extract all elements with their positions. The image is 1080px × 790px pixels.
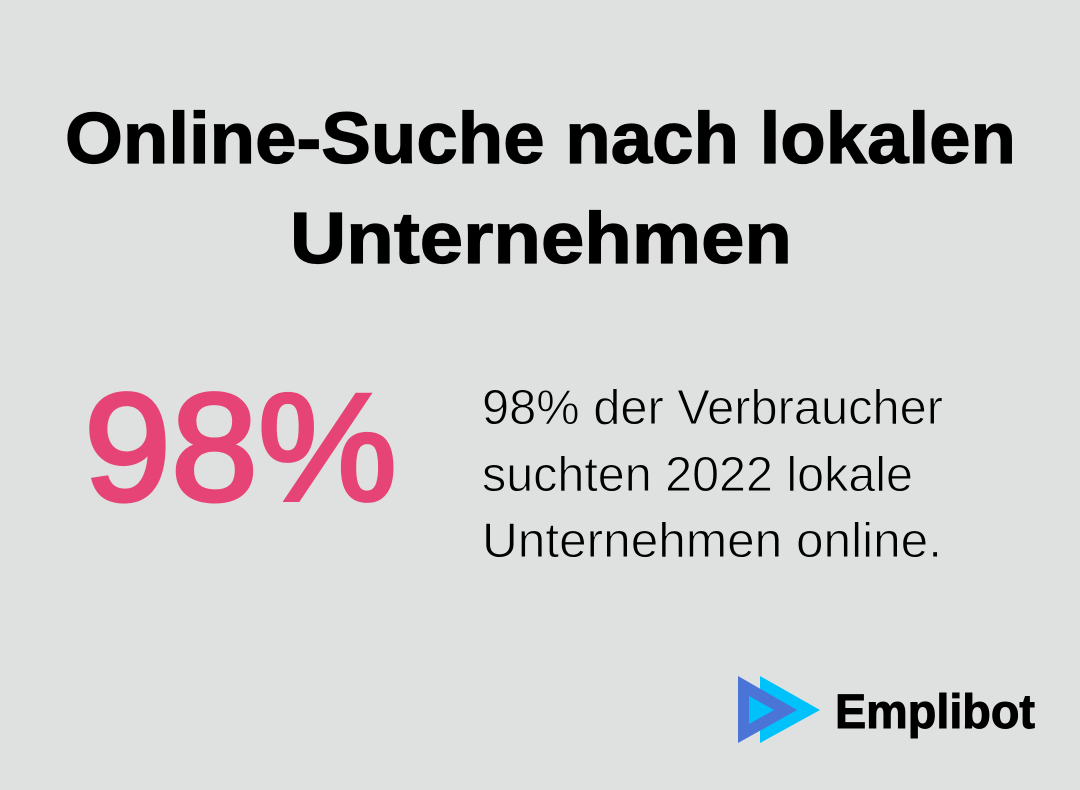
title: Unternehmen [290,199,792,279]
logo wordmark: Emplibot [835,686,1035,739]
description text: 98% der Verbraucher [482,381,943,435]
title [65,99,1016,279]
description text: Unternehmen online. [482,514,942,568]
title: Online-Suche nach lokalen [65,99,1016,179]
description text: suchten 2022 lokale [482,448,913,502]
icon: play triangles [738,676,820,743]
logo: Emplibot [738,676,1035,743]
big statistic: 98%: 98% [84,362,397,533]
description text [482,381,943,568]
